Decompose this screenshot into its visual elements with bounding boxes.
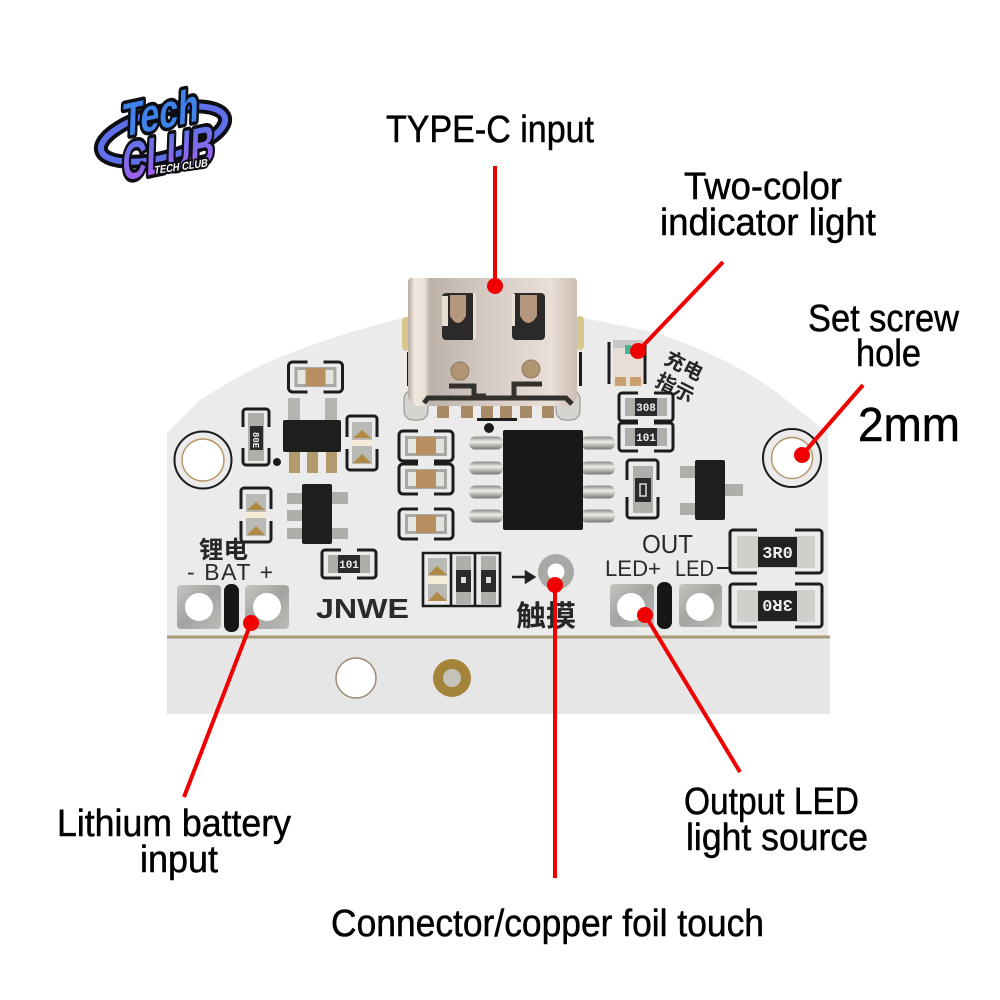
diode pair right of chip	[347, 416, 377, 470]
lower hole	[336, 658, 376, 698]
chip right pins	[581, 436, 615, 522]
lower copper pad	[433, 659, 471, 697]
pointer: battery	[184, 615, 259, 797]
logo: Tech Club: CLUB	[122, 114, 216, 193]
board: lower strip	[167, 636, 830, 714]
connector shell cut lines	[424, 384, 572, 404]
silkscreen line under connector	[477, 418, 517, 421]
label: Lithium battery input	[57, 803, 291, 881]
right mounting hole	[763, 429, 821, 487]
connector tail pins	[437, 404, 554, 418]
label: TYPE-C input: TYPE-C input	[386, 109, 594, 151]
silkscreen: lithium: 锂电	[199, 537, 248, 564]
diode pair left	[241, 488, 271, 542]
battery pads	[177, 584, 289, 632]
resistor 3R0 top	[730, 530, 822, 573]
silkscreen: BAT: - BAT +	[187, 559, 273, 585]
resistor 101 right	[619, 423, 673, 451]
silkscreen: JNWE: JNWE	[316, 593, 409, 624]
LED output pads	[610, 582, 722, 629]
SOT-23 right	[680, 460, 743, 520]
resistor 308: 308	[636, 403, 656, 415]
left mounting hole	[174, 432, 232, 488]
chip body	[503, 430, 583, 530]
label: Output LED light source: Output LED	[684, 781, 859, 823]
indicator LED	[609, 340, 645, 386]
SOP8 main chip	[469, 430, 615, 530]
label: Output LED light source	[684, 781, 868, 859]
connector shell	[408, 278, 577, 406]
logo: Tech Club	[95, 78, 231, 193]
resistor 3R0 top: 3R0	[762, 545, 793, 564]
chip left pins	[469, 436, 503, 522]
label: Set screw hole: hole	[856, 333, 921, 375]
silkscreen: charge indicator: 充电	[661, 347, 707, 386]
label: Two-color indicator light: indicator light	[660, 202, 876, 244]
silkscreen: LED labels: LED+	[605, 556, 661, 581]
capacitor column 1	[399, 431, 453, 461]
pointer: TYPE-C	[487, 166, 503, 294]
dot marker	[273, 458, 281, 466]
silkscreen: LED labels: LED	[675, 556, 714, 581]
pointer: indicator	[630, 262, 723, 359]
USB type-C connector	[402, 278, 584, 421]
label: Set screw hole: Set screw	[808, 298, 960, 340]
label: Lithium battery input: Lithium battery	[57, 803, 291, 845]
capacitor top left	[288, 362, 342, 392]
pin 1 dot	[484, 423, 494, 433]
capacitor column 3	[399, 509, 453, 539]
pointer: LED output	[637, 607, 740, 772]
label: Output LED light source: light source	[686, 817, 868, 859]
connector solder feet	[404, 390, 580, 420]
resistor vertical right	[627, 460, 658, 518]
silkscreen: charge indicator: 指示	[652, 369, 698, 408]
SOT-23 left	[287, 484, 348, 544]
label: Lithium battery input: input	[140, 839, 218, 881]
connector rivets	[451, 360, 540, 380]
pointer: touch	[547, 577, 563, 878]
PCB board	[167, 278, 830, 714]
resistor 101 left	[322, 550, 376, 578]
resistor 101 left: 101	[339, 560, 359, 572]
connector side silkscreen	[407, 352, 582, 386]
touch pad	[538, 554, 574, 590]
label: 2mm: 2mm	[858, 399, 960, 452]
connector left window	[442, 293, 476, 340]
silkscreen: touch: 触摸	[516, 600, 576, 633]
resistor 3R0 bottom	[730, 584, 822, 627]
label: Set screw hole	[808, 298, 960, 375]
silkscreen: OUT: OUT	[642, 529, 693, 559]
logo: Tech Club: Tech	[122, 78, 200, 147]
pad block center	[423, 553, 500, 606]
resistor 308	[619, 393, 673, 421]
connector side tabs	[402, 316, 584, 351]
touch arrow	[512, 572, 534, 582]
board: upper outline	[167, 317, 828, 637]
label: Two-color indicator light	[660, 166, 876, 244]
resistor 101 right: 101	[636, 433, 656, 445]
SOT-223 chip	[283, 398, 341, 473]
pointer: screw hole	[794, 385, 863, 463]
gold edge line	[167, 636, 830, 638]
resistor 3R0 bottom: 3R0	[762, 594, 793, 613]
resistor 80E vertical	[243, 409, 269, 465]
logo: Tech Club: TECH CLUB	[154, 157, 208, 177]
connector right window	[512, 293, 545, 340]
silkscreen: LED labels	[605, 556, 731, 581]
resistor 80E vertical: 80E	[250, 432, 260, 449]
label: Connector/copper foil touch: Connector/copper foil touch	[331, 903, 764, 945]
capacitor column 2	[399, 464, 453, 494]
label: Two-color indicator light: Two-color	[684, 166, 842, 208]
silkscreen: charge indicator	[652, 347, 707, 408]
